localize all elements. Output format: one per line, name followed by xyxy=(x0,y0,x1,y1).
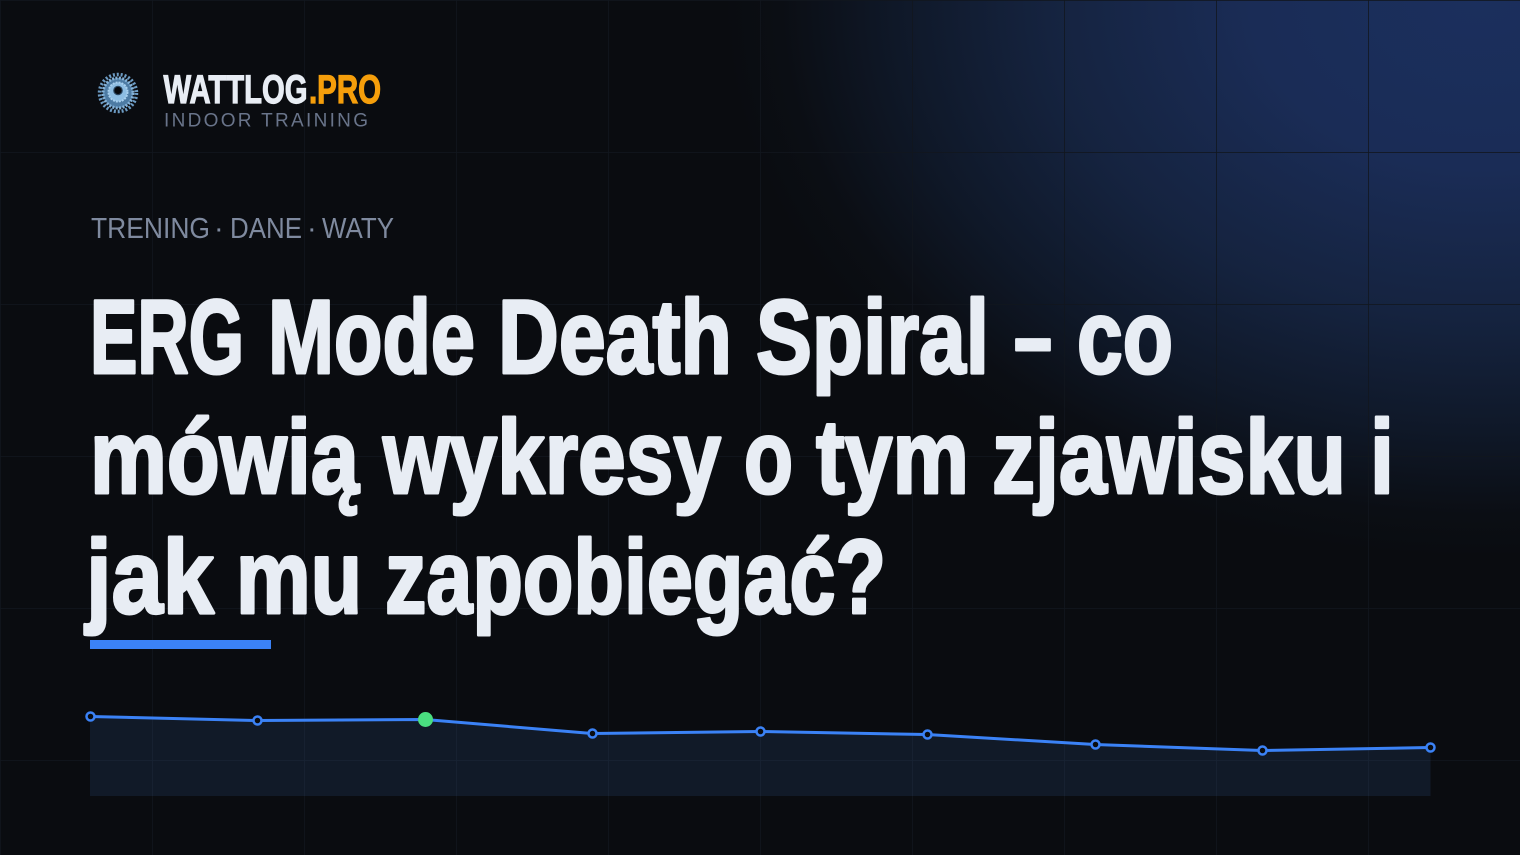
title: tym xyxy=(816,399,969,516)
brand tagline: INDOOR TRAINING xyxy=(164,110,368,132)
title: mówią xyxy=(90,399,360,516)
title xyxy=(84,279,1394,636)
title: zapobiegać? xyxy=(385,519,886,636)
chart area fill xyxy=(90,716,1430,796)
chart line xyxy=(90,716,1430,750)
eyebrow text: DANE xyxy=(230,213,302,245)
title: – xyxy=(1014,279,1052,396)
logo xyxy=(100,68,381,132)
title: Spiral xyxy=(756,279,989,396)
title: Mode xyxy=(268,279,475,396)
eyebrow text: WATY xyxy=(322,213,394,245)
eyebrow text: TRENING xyxy=(91,213,210,245)
eyebrow text: · xyxy=(307,213,317,245)
title: ERG xyxy=(90,279,244,396)
eyebrow text xyxy=(91,213,394,245)
line chart xyxy=(86,712,1434,796)
icon: cassette gear xyxy=(100,74,136,112)
title: zjawisku xyxy=(992,399,1346,516)
title: wykresy xyxy=(382,399,721,516)
eyebrow text: · xyxy=(214,213,224,245)
title: mu xyxy=(236,519,362,636)
title: o xyxy=(744,399,793,516)
title: co xyxy=(1077,279,1173,396)
title: Death xyxy=(498,279,732,396)
highlighted data point xyxy=(418,712,433,727)
brand name: .PRO xyxy=(309,68,381,112)
title: jak xyxy=(84,519,215,636)
brand name: WATTLOG xyxy=(164,68,308,112)
title: i xyxy=(1370,399,1394,516)
chart data points xyxy=(86,712,1434,754)
title accent underline xyxy=(90,640,271,649)
